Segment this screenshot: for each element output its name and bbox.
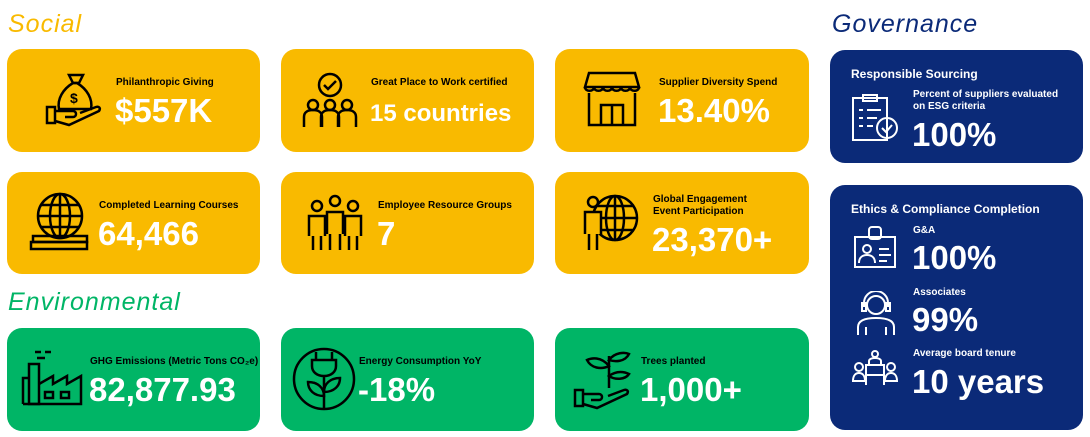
label: Philanthropic Giving — [116, 77, 214, 88]
label: on ESG criteria — [913, 101, 985, 112]
icon: ID badge — [854, 226, 896, 268]
value: 23,370+ — [652, 221, 772, 258]
icon: board meeting — [852, 350, 898, 385]
value: 7 — [377, 215, 395, 252]
icon: store — [583, 72, 641, 126]
title: Ethics & Compliance Completion — [851, 202, 1040, 216]
value: 64,466 — [98, 215, 199, 252]
card: great place to work — [281, 49, 534, 152]
heading: Environmental: Environmental — [8, 288, 181, 316]
label: Completed Learning Courses — [99, 200, 238, 211]
icon: money bag: $ — [70, 90, 78, 106]
label: board tenure: Average board tenure — [913, 348, 1016, 359]
title: Responsible Sourcing — [851, 67, 978, 81]
value: 100% — [912, 116, 996, 153]
icon: plug with leaves — [292, 348, 356, 410]
value: 1,000+ — [640, 371, 742, 408]
card: responsible sourcing — [830, 50, 1083, 163]
value: 13.40% — [658, 92, 770, 129]
card: energy consumption — [281, 328, 534, 431]
value: -18% — [358, 371, 435, 408]
icon: group of people — [308, 194, 362, 250]
label: Employee Resource Groups — [378, 200, 512, 211]
icon: globe with books — [30, 192, 88, 250]
card: employee resource groups — [281, 172, 534, 274]
label: Supplier Diversity Spend — [659, 77, 777, 88]
icon: clipboard check — [852, 94, 898, 141]
icon: associate headset — [857, 291, 895, 335]
value: 100%: 100% — [912, 239, 996, 276]
label: G&A: G&A — [913, 225, 935, 236]
card: philanthropic giving — [7, 49, 260, 152]
icon: person with globe — [584, 194, 638, 250]
card: ethics & compliance — [830, 185, 1083, 430]
icon: factory — [22, 350, 82, 406]
label: Great Place to Work certified — [371, 77, 508, 88]
value: 99%: 99% — [912, 301, 978, 338]
card: global engagement — [555, 172, 809, 274]
label: Event Participation — [653, 206, 744, 217]
value: 15 countries — [370, 100, 511, 127]
label: GHG Emissions (Metric Tons CO₂e) — [90, 356, 258, 367]
card: GHG emissions — [7, 328, 260, 431]
heading: Governance: Governance — [832, 10, 978, 38]
value: 10 years: 10 years — [912, 363, 1044, 400]
label: Energy Consumption YoY — [359, 356, 481, 367]
label: Percent of suppliers evaluated — [913, 89, 1058, 100]
label: Associates: Associates — [913, 287, 966, 298]
label — [913, 89, 1058, 112]
card: supplier diversity — [555, 49, 809, 152]
icon: certified people — [302, 72, 358, 127]
heading: Social: Social — [8, 10, 82, 38]
icon: money bag — [46, 74, 102, 126]
card: learning courses — [7, 172, 260, 274]
label: Trees planted — [641, 356, 705, 367]
value: $557K — [115, 92, 212, 129]
label — [653, 194, 747, 217]
icon: hand with plant — [574, 352, 631, 410]
label: Global Engagement — [653, 194, 747, 205]
value: 82,877.93 — [89, 371, 236, 408]
card: trees planted — [555, 328, 809, 431]
